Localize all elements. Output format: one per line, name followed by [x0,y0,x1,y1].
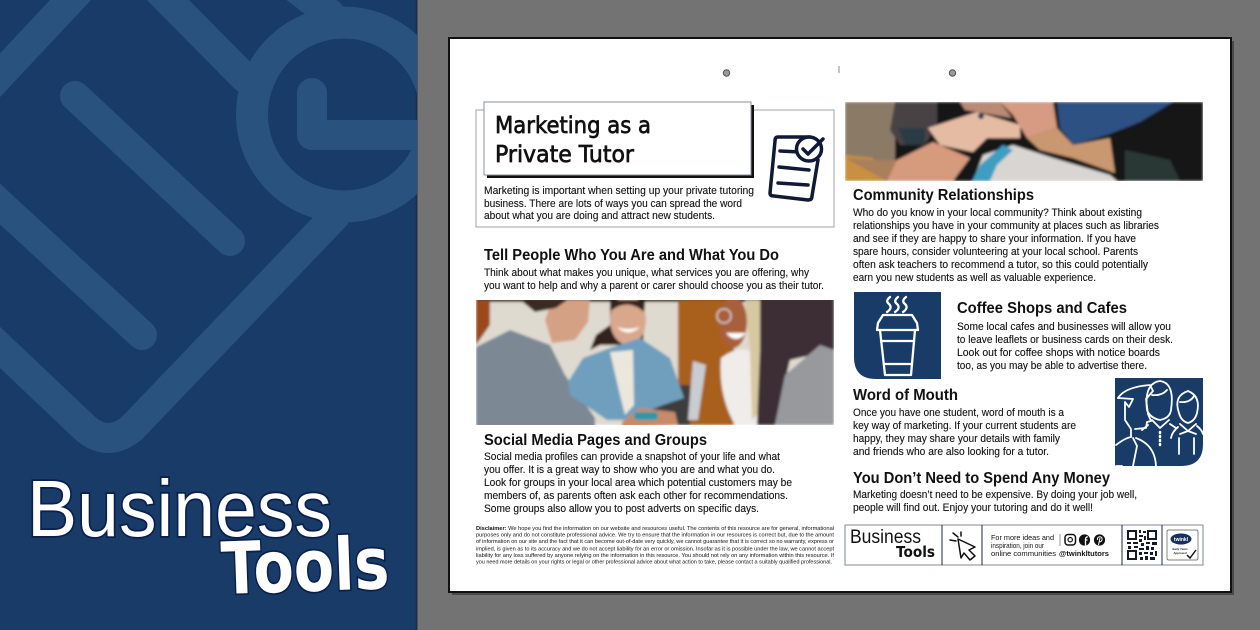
icon: large clipboard watermark [0,0,436,438]
icon: coffee cup [854,292,941,379]
body text: and see if they are happy to share your information. If you have [853,233,1136,245]
text: intro [484,185,754,222]
section: social media [484,432,792,515]
text: disclaimer: you need more details on your rights or legal or other professional advice about what action to take, please contact a suitably qualified professional. [476,560,832,566]
body text: Look out for coffee shops with notice boards [957,347,1160,359]
text: community invite: @twinkltutors [1059,549,1109,558]
body text: earn you new students as well as valuable experience. [853,272,1096,284]
heading: You Don’t Need to Spend Any Money [853,470,1110,487]
registration marks [723,66,956,76]
body text: people will find out. Enjoy your tutoring and do it well! [853,502,1093,514]
section: no need to spend [853,470,1137,514]
text: community invite [991,533,1109,558]
body text [484,451,792,515]
body text [957,321,1173,372]
body text: Social media profiles can provide a snapshot of your life and what [484,451,781,463]
body text: relationships you have in your community at places such as libraries [853,220,1159,232]
heading: Marketing as a: Marketing as a [495,113,651,139]
heading: Word of Mouth [853,387,958,404]
body text: Who do you know in your local community? Think about existing [853,207,1142,219]
text: disclaimer: of information on our site and the fact that it can become out-of-date very quickly, we cannot guarantee that it is correct so no warranty, express or [476,539,834,545]
text: community invite: For more ideas and [991,533,1054,542]
section: community relationships [853,187,1159,284]
text: intro: Marketing is important when setting up your private tutoring [484,185,754,197]
text: community invite: inspiration, join our [991,541,1044,550]
heading: Private Tutor: Private Tutor [495,142,635,168]
panel: blue sidebar [0,0,436,630]
icon: twinkl badge: twinkl [1174,537,1189,543]
body text [853,489,1137,514]
title: Business: Business [27,464,332,553]
panel: introduction box [476,102,834,227]
icon: twinkl badge [1167,530,1198,560]
body text: you offer. It is a great way to show who you are and what you do. [484,464,775,476]
body text: to leave leaflets or business cards on their desk. [957,334,1173,346]
text: intro: business. There are lots of ways you can spread the word [484,198,742,210]
text: disclaimer: purposes only and do not constitute professional advice. We try to ensure that the information in our resources is correct but, due to the amount [476,532,835,538]
footer logo: Business Tools [850,526,935,561]
body text: you want to help and why a parent or carer should choose you as their tutor. [484,280,824,292]
body text: Think about what makes you unique, what services you are offering, why [484,267,809,279]
body text: Some groups also allow you to post adverts on specific days. [484,503,759,515]
icon: QR code [1127,530,1157,560]
title card [484,102,754,178]
heading: Tell People Who You Are and What You Do [484,247,779,264]
body text [484,267,824,292]
body text: Look for groups in your local area which potential customers may be [484,477,792,489]
body text: Once you have one student, word of mouth is a [853,407,1065,419]
body text: Marketing doesn’t need to be expensive. By doing your job well, [853,489,1137,501]
icon: twinkl badge: Early Years [1172,547,1188,551]
body text: Some local cafes and businesses will allow you [957,321,1171,333]
footer logo: Business Tools: Tools [896,543,935,561]
body text: key way of marketing. If your current students are [853,420,1076,432]
text: community invite: online communities [991,549,1056,558]
text: disclaimer: Disclaimer: We hope you find the information on our website and resources useful. The contents of this resource are for general, informational [476,526,834,532]
section: coffee shops [957,300,1173,372]
body text: happy, they may share your details with family [853,433,1060,445]
body text: too, as you may be able to advertise there. [957,360,1147,372]
icon: twinkl badge: Approved [1173,551,1187,555]
text: intro: about what you are doing and attract new students. [484,210,715,222]
icons: social media [1065,534,1105,546]
footer logo: Business Tools: Business [850,526,921,548]
icon: three people [1115,378,1203,466]
section: tell people [484,247,824,292]
body text: often ask teachers to recommend a tutor, so this could potentially [853,259,1148,271]
title: Tools: Tools [220,521,390,611]
body text [853,207,1159,284]
section: word of mouth [853,387,1076,458]
heading: Community Relationships [853,187,1034,204]
body text: and friends who are also looking for a tutor. [853,446,1049,458]
icon: checklist [770,137,823,200]
heading: Social Media Pages and Groups [484,432,707,449]
text: disclaimer [476,526,835,566]
body text [853,407,1076,458]
panel: footer strip [845,525,1203,565]
body text: members of, as parents often ask each other for recommendations. [484,490,788,502]
text: disclaimer: liability for any loss suffered by anyone relying on the information in this resource. You should not rely on any information within this resource. If [476,553,835,559]
body text: spare hours, consider volunteering at your local school. Parents [853,246,1138,258]
panel: worksheet page [449,38,1234,595]
icon: cursor click [950,532,975,560]
photo: stacked hands [845,102,1203,181]
photo: students around a table [476,295,834,427]
text: disclaimer: implied, is given as to its accuracy and we do not accept liability for an error or omission. Insofar as it is possible under the law, we cannot accept [476,546,835,552]
heading: Coffee Shops and Cafes [957,300,1127,317]
